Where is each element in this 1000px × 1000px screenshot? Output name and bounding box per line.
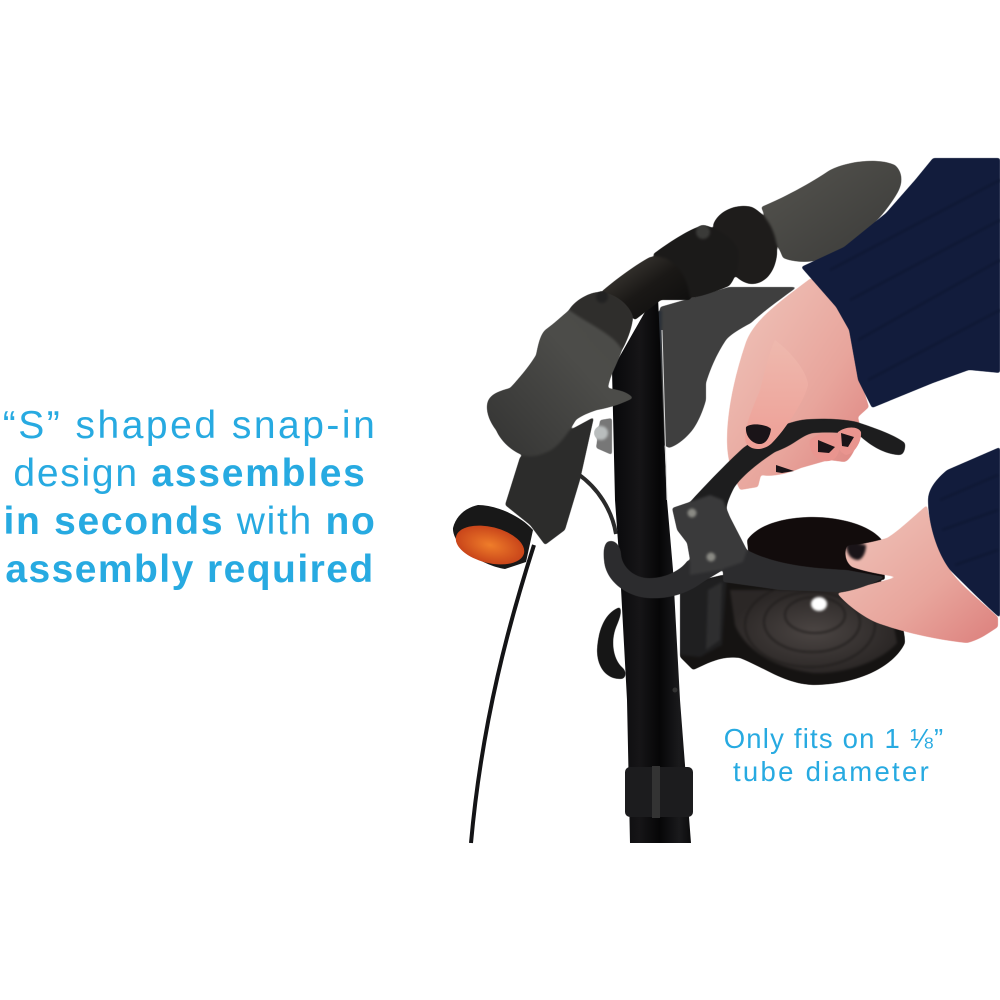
handlebar and upper grip — [601, 161, 901, 320]
heading text block: assembly required — [5, 548, 375, 591]
rollator frame pole — [612, 297, 693, 843]
s-shaped clip — [597, 419, 905, 679]
right hand behind the clip — [727, 278, 869, 490]
caption: tube diameter: tube diameter — [733, 756, 931, 787]
brake cable — [471, 474, 616, 843]
clip band around pole — [604, 541, 723, 598]
heading text block: design assembles — [13, 452, 367, 495]
second hook — [597, 607, 626, 679]
icon: orange reflector — [452, 505, 533, 571]
caption: tube diameter: Only fits on 1 ⅛” — [724, 723, 944, 754]
left hand holding the cup — [837, 505, 998, 643]
caption: tube diameter — [724, 723, 944, 787]
clip arm — [723, 550, 885, 592]
heading text block: “S” shaped snap-in — [3, 404, 377, 447]
lower screw — [706, 552, 716, 562]
brake bracket — [594, 287, 797, 455]
navy sweater sleeves — [801, 158, 1000, 618]
lower hand grip and brake lever — [487, 291, 633, 545]
clip lever — [690, 419, 905, 510]
heading text block — [3, 404, 377, 591]
clip plate with screws — [672, 495, 747, 575]
right hand fingers and nails — [745, 340, 861, 473]
cup holder base — [680, 517, 905, 685]
heading text block: in seconds with no — [3, 500, 377, 543]
